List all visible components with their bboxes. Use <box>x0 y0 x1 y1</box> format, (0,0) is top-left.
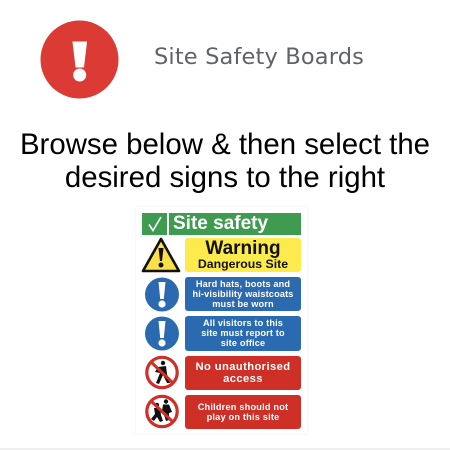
blue panel: PPE: must be worn <box>212 299 274 309</box>
blue panel: visitors: site must report to <box>201 328 285 338</box>
blue panel: PPE <box>185 277 301 311</box>
red panel: children: play on this site <box>207 412 279 422</box>
yellow warning panel: Warning <box>205 238 281 259</box>
yellow warning panel <box>185 238 301 272</box>
green tick box <box>142 212 167 234</box>
bottom edge strip <box>0 448 450 450</box>
instruction text: Browse below & then select the <box>20 128 430 161</box>
icon: blue mandatory circle 1 <box>145 278 179 312</box>
blue panel: visitors: site office <box>221 338 265 348</box>
icon: warning triangle <box>142 238 180 272</box>
green heading bar: Site safety <box>173 212 268 234</box>
title: Site Safety Boards <box>154 44 364 70</box>
icon: blue mandatory circle 2 <box>145 316 179 350</box>
yellow warning panel: Dangerous Site <box>198 257 288 271</box>
instruction text <box>20 128 430 194</box>
green heading bar <box>169 212 301 234</box>
instruction text: desired signs to the right <box>65 161 385 194</box>
blue panel: PPE: Hard hats, boots and <box>196 279 290 289</box>
red panel: no access: No unauthorised <box>196 361 290 373</box>
blue panel: PPE: hi-visibility waistcoats <box>192 289 294 299</box>
icon: no children <box>145 394 179 428</box>
safety sign board <box>136 207 307 434</box>
blue panel: visitors: All visitors to this <box>203 318 283 328</box>
red panel: children <box>185 395 301 429</box>
red panel: no access: access <box>223 373 263 385</box>
red panel: children: Children should not <box>198 402 288 412</box>
red panel: no access <box>185 356 301 390</box>
blue panel: visitors <box>185 316 301 350</box>
icon: no unauthorised access <box>145 356 179 390</box>
icon: red alert circle <box>40 20 118 98</box>
